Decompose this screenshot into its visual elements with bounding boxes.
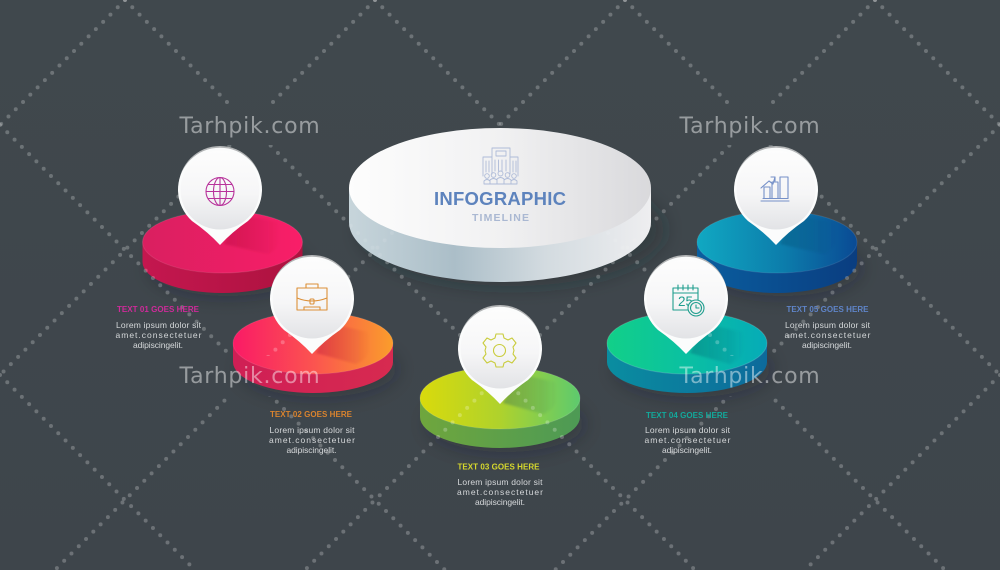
icon: gear bbox=[483, 334, 516, 367]
text block: step 03: adipiscingelit. bbox=[475, 497, 525, 507]
text block: step 03: amet.consectetuer bbox=[457, 487, 543, 497]
panel: step 03 disc bbox=[420, 367, 584, 452]
text block: step 01: TEXT 01 GOES HERE bbox=[117, 305, 200, 314]
pin: step 03 bbox=[458, 305, 542, 404]
text block: step 03: Lorem ipsum dolor sit bbox=[458, 477, 543, 487]
pin: step 02 bbox=[270, 255, 354, 354]
heading: infographic: INFOGRAPHIC bbox=[434, 188, 566, 209]
text block: step 04: Lorem ipsum dolor sit bbox=[645, 425, 731, 435]
text block: step 02: amet.consectetuer bbox=[269, 435, 355, 445]
icon: office building with people bbox=[483, 148, 518, 184]
text block: step 04: adipiscingelit. bbox=[662, 445, 712, 455]
text block: step 05 bbox=[784, 305, 871, 350]
watermarks bbox=[179, 114, 820, 389]
text block: step 05: amet.consectetuer bbox=[784, 330, 871, 340]
text block: step 05: TEXT 05 GOES HERE bbox=[786, 305, 869, 314]
watermarks: Tarhpik.com bbox=[679, 114, 820, 139]
text block: step 02: TEXT 02 GOES HERE bbox=[270, 410, 353, 419]
text block: step 03 bbox=[457, 462, 543, 507]
pin: step 05 bbox=[734, 146, 818, 245]
text block: step 01: amet.consectetuer bbox=[116, 330, 202, 340]
text block: step 01: adipiscingelit. bbox=[133, 340, 183, 350]
text block: step 02 bbox=[269, 410, 355, 455]
panel: step 04 disc bbox=[607, 312, 771, 397]
text block: step 01 bbox=[116, 305, 202, 350]
disc side bbox=[349, 188, 651, 282]
watermarks: Tarhpik.com bbox=[179, 114, 320, 139]
panel: step 02 disc bbox=[233, 312, 397, 397]
pin: step 04 bbox=[644, 255, 728, 354]
text block: step 03: TEXT 03 GOES HERE bbox=[458, 462, 540, 472]
text block: step 05: adipiscingelit. bbox=[802, 340, 852, 350]
text block: step 04: TEXT 04 GOES HERE bbox=[646, 411, 729, 420]
panel: step 01 disc bbox=[142, 211, 306, 296]
text block: step 05: Lorem ipsum dolor sit bbox=[785, 320, 871, 330]
icon: calendar with clock: 25 bbox=[678, 294, 693, 309]
text block: step 04 bbox=[644, 411, 731, 455]
pin: step 01 bbox=[178, 146, 262, 245]
panel: step 05 disc bbox=[697, 211, 861, 296]
icon: globe bbox=[206, 178, 234, 206]
text block: step 04: amet.consectetuer bbox=[644, 435, 731, 445]
watermarks: Tarhpik.com bbox=[679, 364, 820, 389]
heading: timeline: TIMELINE bbox=[472, 212, 529, 224]
icon: growth bar chart bbox=[761, 177, 789, 201]
text block: step 02: adipiscingelit. bbox=[286, 445, 336, 455]
text block: step 01: Lorem ipsum dolor sit bbox=[116, 320, 202, 330]
disc top bbox=[349, 128, 651, 248]
panel: central disc bbox=[349, 128, 664, 286]
text block: step 02: Lorem ipsum dolor sit bbox=[270, 425, 355, 435]
watermarks: Tarhpik.com bbox=[179, 364, 320, 389]
icon: briefcase bbox=[297, 284, 327, 310]
